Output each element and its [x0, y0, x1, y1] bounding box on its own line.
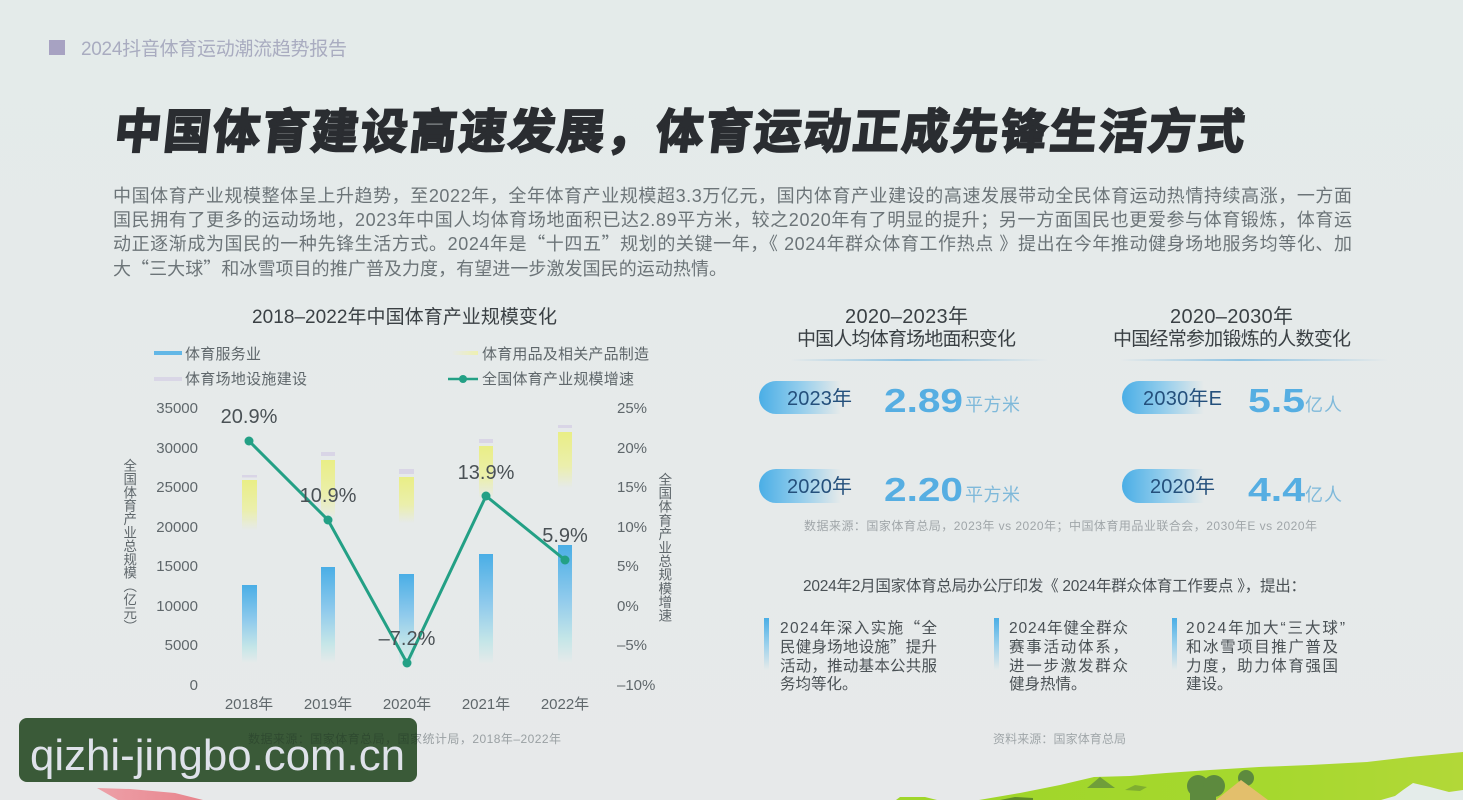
- right axis title: 全国体育产业总规模增速: [658, 468, 672, 624]
- left axis ticks: [156, 400, 198, 694]
- policy item 3: 和冰雪项目推广普及: [1186, 638, 1338, 656]
- policy source: 资料来源：国家体育总局: [993, 731, 1126, 746]
- left axis ticks: 20000: [156, 519, 198, 536]
- intro paragraph: 动正逐渐成为国民的一种先锋生活方式。2024年是“十四五”规划的关键一年，《 2024年群众体育工作热点 》提出在今年推动健身场地服务均等化、加: [113, 230, 1352, 256]
- row 2030E: 2030年E: [1143, 387, 1222, 410]
- row 2023: 2023年: [787, 387, 852, 410]
- year labels: 2019年: [304, 696, 352, 713]
- landscape illustration: [896, 752, 1463, 800]
- panel: regular exercisers: [1113, 305, 1389, 508]
- chart source: 数据来源：国家体育总局，国家统计局，2018年–2022年: [248, 731, 561, 746]
- intro paragraph: 大“三大球”和冰雪项目的推广普及力度，有望进一步激发国民的运动热情。: [113, 255, 727, 281]
- data labels: 5.9%: [542, 525, 588, 547]
- chart legend: 体育服务业: [185, 346, 261, 363]
- right axis ticks: 25%: [617, 400, 647, 417]
- intro paragraph: 中国体育产业规模整体呈上升趋势，至2022年，全年体育产业规模超3.3万亿元，国内体育产业建设的高速发展带动全民体育运动热情持续高涨，一方面: [113, 186, 1352, 206]
- left axis ticks: 0: [190, 677, 198, 694]
- header tag: 2024抖音体育运动潮流趋势报告: [81, 38, 347, 60]
- left axis ticks: 30000: [156, 440, 198, 457]
- intro paragraph: 国民拥有了更多的运动场地，2023年中国人均体育场地面积已达2.89平方米，较之2020年有了明显的提升；另一方面国民也更爱参与体育锻炼，体育运: [113, 210, 1352, 230]
- row 2020: 平方米: [965, 485, 1020, 505]
- chart legend: 体育用品及相关产品制造: [482, 346, 649, 363]
- row 2020: 2020年: [787, 475, 852, 498]
- year labels: [225, 696, 589, 713]
- chart legend: 体育场地设施建设: [185, 371, 307, 388]
- row 2023: 平方米: [965, 395, 1020, 415]
- data labels: 13.9%: [458, 462, 515, 484]
- row 2030E: 亿人: [1305, 395, 1342, 415]
- data labels: 10.9%: [300, 485, 357, 507]
- watermark: 数据来源：国家体育总局，国家统计局，2018年–2022年: [248, 731, 561, 746]
- row 2020: 2020年: [1150, 475, 1215, 498]
- row 2020: 亿人: [1305, 485, 1342, 505]
- policy item 3: 力度，助力体育强国: [1186, 657, 1338, 675]
- policy item 1: [764, 616, 937, 693]
- right axis ticks: –10%: [617, 677, 655, 694]
- chart legend: 全国体育产业规模增速: [482, 370, 634, 388]
- year labels: 2021年: [462, 696, 510, 713]
- right axis ticks: 10%: [617, 519, 647, 536]
- panel: venue area per capita: [759, 305, 1049, 508]
- left axis ticks: 15000: [156, 558, 198, 575]
- row 2020: [759, 469, 1020, 508]
- heading: 中国人均体育场地面积变化: [797, 328, 1016, 350]
- intro paragraph: [113, 186, 1352, 281]
- right axis ticks: [617, 400, 655, 694]
- heading: 中国经常参加锻炼的人数变化: [1113, 328, 1351, 350]
- data labels: 20.9%: [221, 406, 278, 428]
- policy item 1: 务均等化。: [780, 675, 858, 693]
- left axis ticks: 5000: [165, 637, 198, 654]
- right axis ticks: –5%: [617, 637, 647, 654]
- facilities bars: [242, 425, 572, 478]
- policy item 1: 民健身场地设施”提升: [780, 635, 937, 657]
- title: 中国体育建设高速发展，体育运动正成先锋生活方式: [112, 93, 1249, 162]
- row 2023: [759, 381, 1020, 419]
- policy item 2: 健身热情。: [1009, 675, 1087, 693]
- policy item 3: 2024年加大“三大球”: [1186, 619, 1345, 637]
- right axis ticks: 0%: [617, 598, 639, 615]
- policy heading: 2024年2月国家体育总局办公厅印发《 2024年群众体育工作要点 》，提出：: [803, 577, 1306, 595]
- services bars: [242, 545, 572, 664]
- policy item 1: 2024年深入实施“全: [780, 616, 937, 638]
- stats source: 数据来源：国家体育总局，2023年 vs 2020年；中国体育用品业联合会，2030年E vs 2020年: [804, 518, 1317, 533]
- row 2023: 2.89: [884, 382, 963, 419]
- data labels: –7.2%: [379, 628, 436, 650]
- policy item 3: [1172, 618, 1345, 693]
- row 2020: [1122, 469, 1342, 508]
- left axis ticks: 10000: [156, 598, 198, 615]
- right axis ticks: 15%: [617, 479, 647, 496]
- year labels: 2018年: [225, 696, 273, 713]
- goods bars: [242, 432, 572, 530]
- policy item 3: 建设。: [1186, 675, 1233, 693]
- icon: tent: [1216, 780, 1268, 800]
- row 2020: 4.4: [1248, 471, 1306, 508]
- row 2020: 2.20: [884, 471, 963, 508]
- heading: 2020–2023年: [845, 305, 968, 328]
- year labels: 2020年: [383, 696, 431, 713]
- left axis title: 全国体育产业总规模︵亿元︶: [124, 454, 138, 635]
- year labels: 2022年: [541, 696, 589, 713]
- policy item 2: [994, 618, 1128, 693]
- heading: 2020–2030年: [1170, 305, 1293, 328]
- data labels: [221, 406, 588, 650]
- chart heading: 2018–2022年中国体育产业规模变化: [252, 306, 557, 328]
- heading: [797, 305, 1016, 350]
- bar and line chart: [124, 400, 672, 713]
- policy item 2: 进一步激发群众: [1009, 657, 1128, 675]
- left axis ticks: 35000: [156, 400, 198, 417]
- watermark: qizhi-jingbo.com.cn: [30, 731, 405, 780]
- right axis ticks: 20%: [617, 440, 647, 457]
- policy item 1: 活动，推动基本公共服: [780, 657, 937, 675]
- policy item 2: 2024年健全群众: [1009, 619, 1128, 637]
- growth line: [244, 436, 570, 668]
- row 2030E: [1122, 381, 1342, 419]
- policy item 2: 赛事活动体系，: [1009, 637, 1128, 656]
- snow patch: [1381, 783, 1463, 800]
- pink decoration: [97, 788, 203, 800]
- row 2030E: 5.5: [1248, 382, 1305, 419]
- trees: [1187, 770, 1254, 800]
- left axis ticks: 25000: [156, 479, 198, 496]
- chart legend: [154, 346, 649, 388]
- right axis ticks: 5%: [617, 558, 639, 575]
- heading: [1113, 305, 1351, 350]
